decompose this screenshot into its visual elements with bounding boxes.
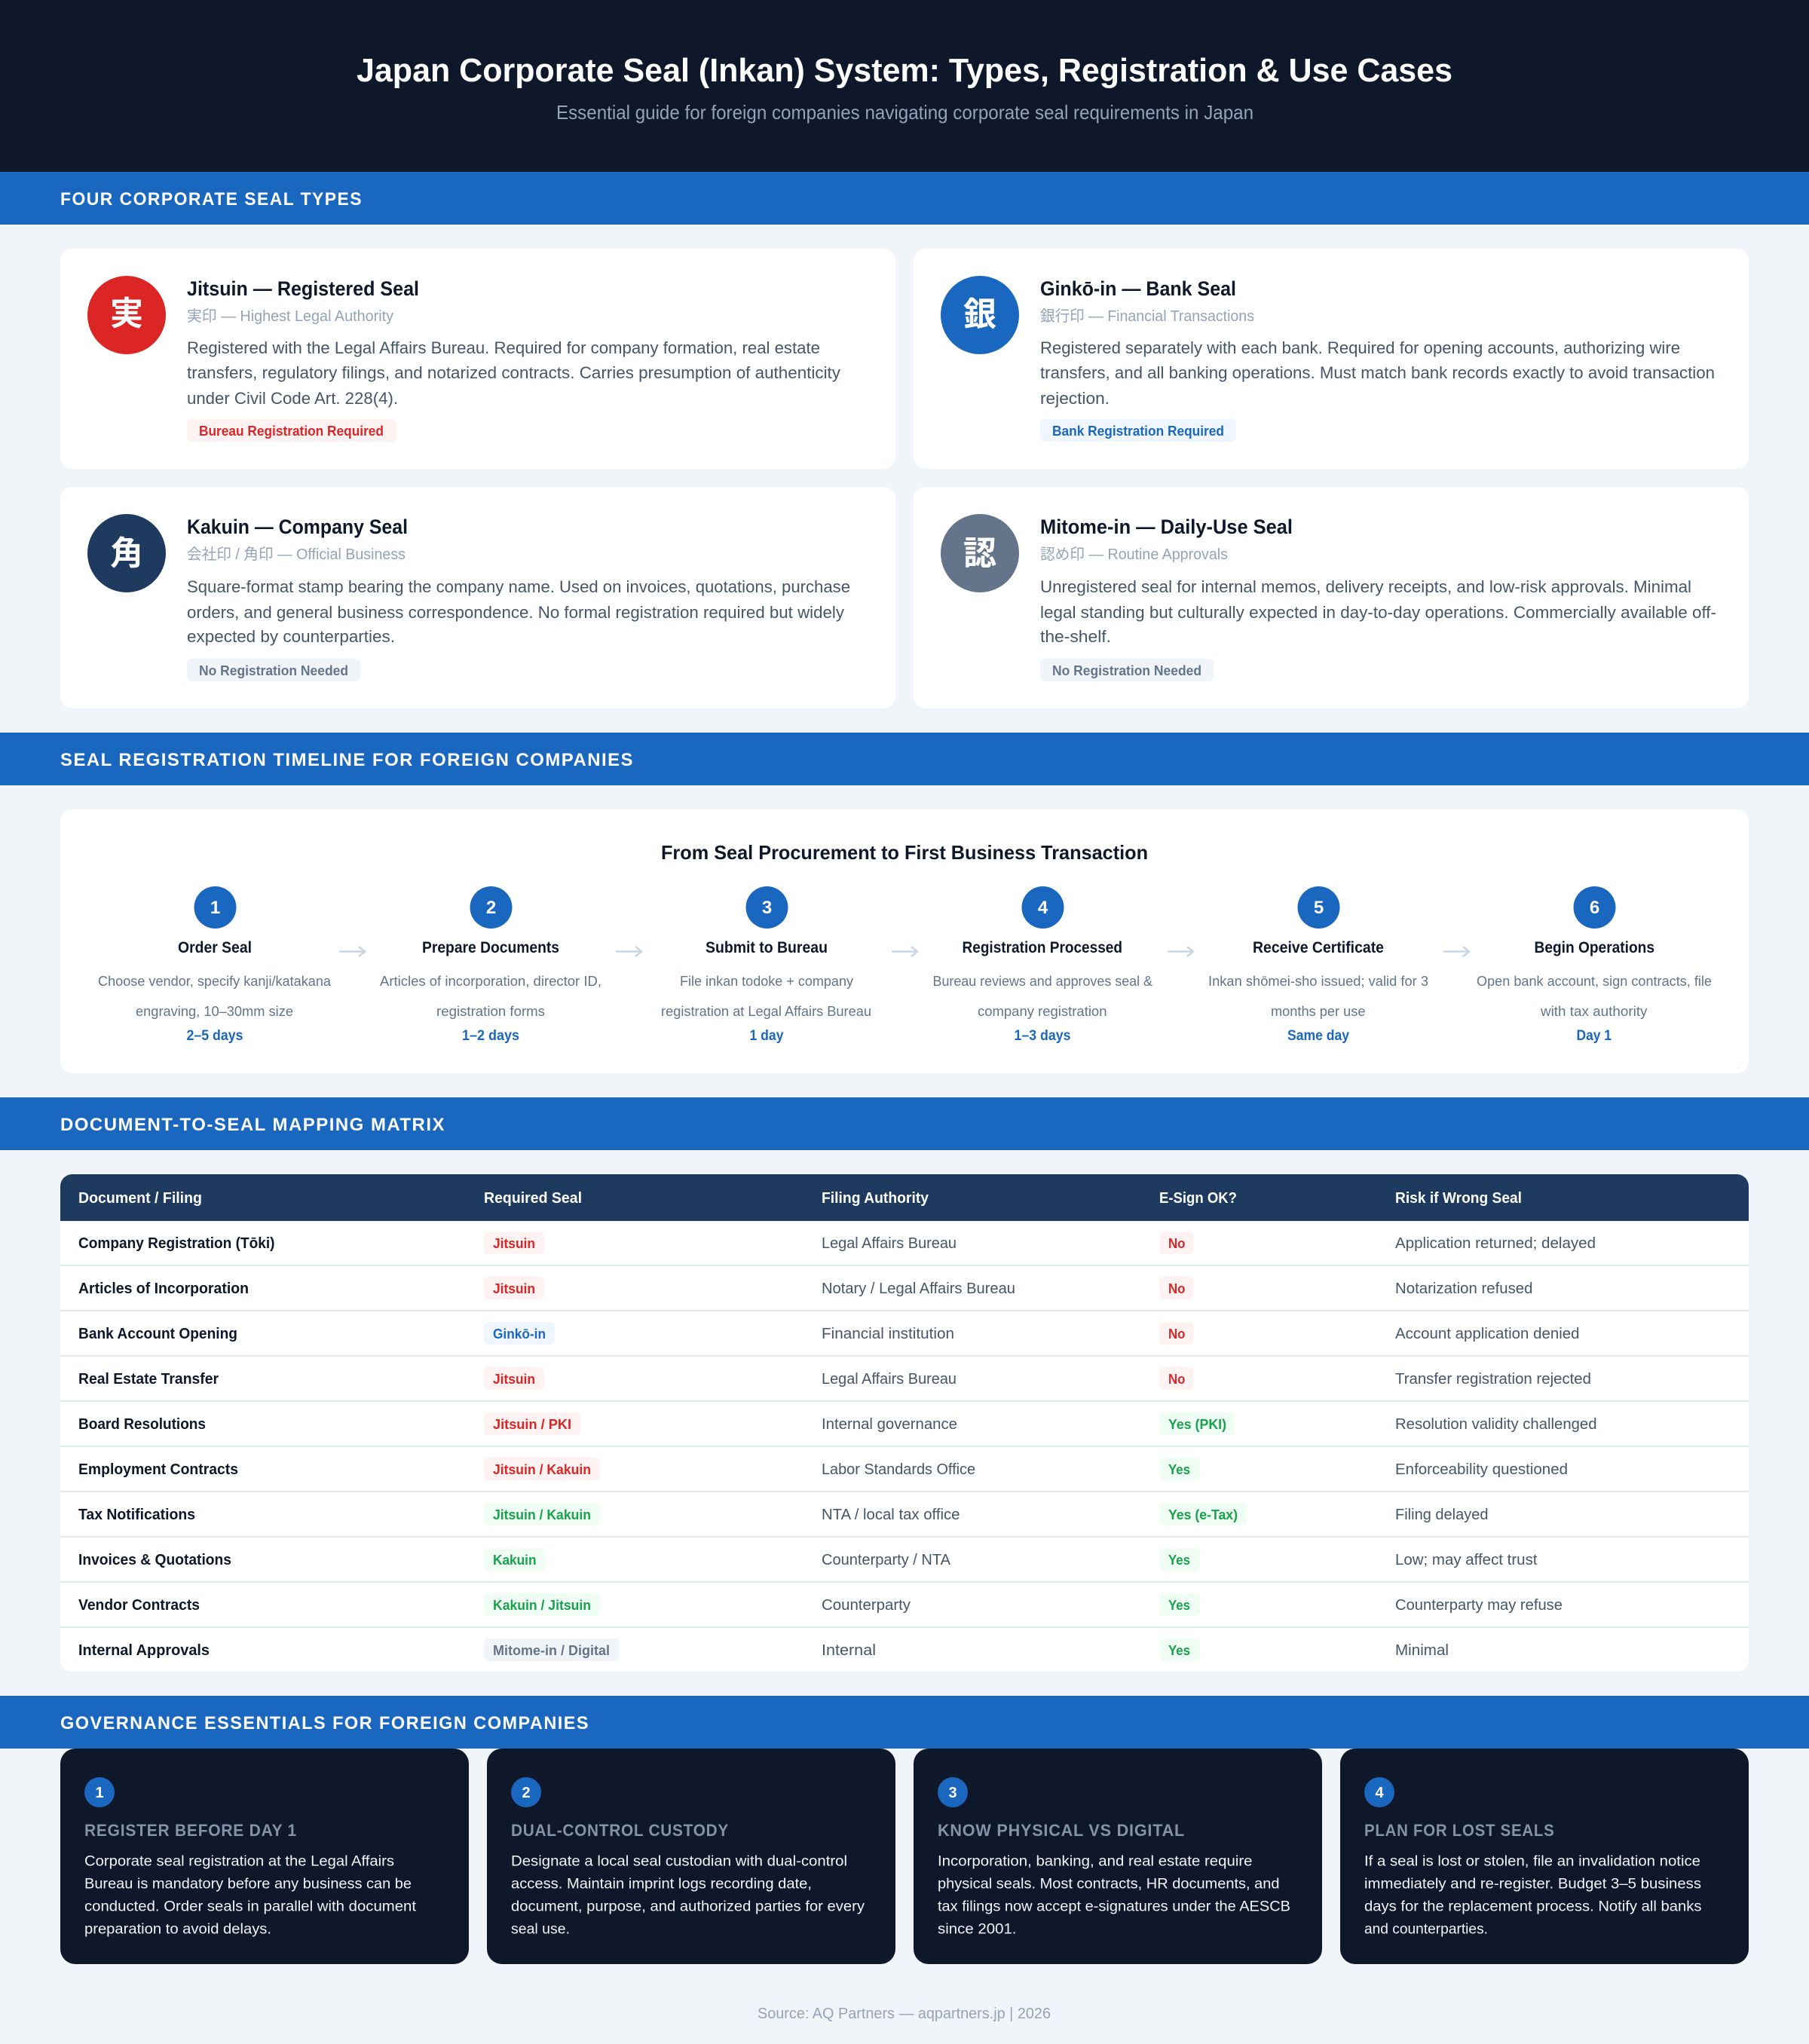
step 3: 3 [762,898,772,918]
tag: no registration needed: No Registration Needed [199,662,348,678]
card title: Kakuin — Company Seal [187,516,408,538]
row: employment contracts: Yes [1168,1461,1190,1477]
card text: seal use. [511,1920,570,1937]
card text: days for the replacement process. Notify all banks [1364,1898,1702,1914]
row: board resolutions: Jitsuin / PKI [493,1416,571,1432]
tag: no registration needed [1040,659,1214,681]
row: tax notifications: Tax Notifications [78,1507,195,1523]
table header row: Required Seal [484,1190,582,1207]
row: internal approvals: Internal [822,1642,876,1659]
step 6: with tax authority [1540,1003,1648,1019]
step 6: 6 [1590,898,1599,918]
card subtitle: 会社印 / 角印 — Official Business [187,546,406,563]
tag: bureau registration required: Bureau Registration Required [199,423,384,439]
step 1: Order Seal [178,939,252,956]
card body: the-shelf. [1040,627,1111,646]
card subtitle: 実印 — Highest Legal Authority [187,308,393,325]
card body: legal standing but culturally expected in day-to-day operations. Commercially available off- [1040,603,1716,622]
tag: bank registration required: Bank Registration Required [1052,423,1224,439]
card text: Incorporation, banking, and real estate require [938,1853,1253,1869]
section heading: mapping matrix: DOCUMENT-TO-SEAL MAPPING MATRIX [60,1115,445,1135]
row: vendor contracts: Counterparty [822,1596,911,1614]
row: real estate transfer [78,1367,1591,1390]
card text: document, purpose, and authorized parties for every [511,1898,865,1914]
card subtitle: 銀行印 — Financial Transactions [1040,308,1254,325]
row: employment contracts: Employment Contracts [78,1461,238,1478]
card body: Registered with the Legal Affairs Bureau. Required for company formation, real estate [187,338,820,357]
step 3 [661,886,871,1044]
icon: Mitome-in seal [941,514,1019,592]
row: tax notifications: Yes (e-Tax) [1168,1507,1238,1522]
tag: bureau registration required [187,419,396,442]
step 2: 2 [486,898,496,918]
table header row: Risk if Wrong Seal [1395,1190,1522,1207]
header banner [0,0,1809,172]
arrow [892,947,917,956]
row: employment contracts: Labor Standards Office [822,1461,975,1478]
icon: Ginko-in seal [941,276,1019,354]
number badge [511,1777,541,1807]
step 1 [98,886,332,1044]
row: articles of incorporation: Notary / Legal Affairs Bureau [822,1280,1015,1297]
card text: preparation to avoid delays. [84,1920,271,1937]
row: employment contracts: Jitsuin / Kakuin [493,1461,591,1477]
number badge [938,1777,968,1807]
icon: Jitsuin seal [87,276,166,354]
card body: orders, and general business correspondence. No formal registration required but widely [187,603,844,622]
panel: Kakuin card [60,487,895,708]
table header row: Filing Authority [822,1190,929,1207]
row: real estate transfer: Legal Affairs Bureau [822,1370,957,1388]
row: employment contracts [78,1458,1568,1480]
card text: Corporate seal registration at the Legal Affairs [84,1853,394,1869]
step 6: Day 1 [1577,1028,1612,1044]
number badge: 3 [948,1785,957,1801]
card body: under Civil Code Art. 228(4). [187,389,398,408]
row: company registration: Company Registration (Tōki) [78,1235,274,1252]
step 1: engraving, 10–30mm size [136,1003,293,1019]
row: board resolutions: Internal governance [822,1415,957,1433]
step 4: 1–3 days [1015,1028,1070,1044]
number badge: 1 [95,1785,104,1801]
row: company registration: Legal Affairs Bureau [822,1235,957,1252]
title: Japan Corporate Seal (Inkan) System: Types, Registration & Use Cases [357,52,1452,89]
row: vendor contracts: Vendor Contracts [78,1597,200,1614]
number badge: 4 [1375,1785,1384,1801]
table: document to seal matrix [60,1174,1749,1672]
card body: Unregistered seal for internal memos, delivery receipts, and low-risk approvals. Minimal [1040,577,1691,596]
table header row [60,1174,1749,1221]
step 2: 1–2 days [462,1028,519,1044]
step 5: Same day [1287,1028,1349,1044]
card body [187,338,840,408]
row: bank account opening: Bank Account Opening [78,1326,237,1342]
card text: conducted. Order seals in parallel with document [84,1898,417,1914]
arrow [616,947,641,956]
card body: Registered separately with each bank. Required for opening accounts, authorizing wire [1040,338,1680,357]
row: bank account opening: Financial institution [822,1325,954,1342]
row: tax notifications: Jitsuin / Kakuin [493,1507,591,1522]
panel: timeline [60,809,1749,1073]
section heading: registration timeline: SEAL REGISTRATION TIMELINE FOR FOREIGN COMPANIES [60,750,634,770]
card text: and counterparties. [1364,1920,1488,1937]
card text: tax filings now accept e-signatures under the AESCB [938,1898,1290,1914]
card title: Ginkō-in — Bank Seal [1040,277,1236,300]
row: vendor contracts: Kakuin / Jitsuin [493,1597,591,1613]
step 3: Submit to Bureau [706,939,828,956]
card text [84,1853,417,1937]
row: tax notifications: NTA / local tax office [822,1506,960,1523]
step 5: Inkan shōmei-sho issued; valid for 3 [1208,973,1428,989]
row: real estate transfer: Jitsuin [493,1371,535,1387]
step 5: Receive Certificate [1253,939,1384,956]
card body [1040,577,1716,646]
row: articles of incorporation [78,1277,1533,1299]
step 4: Registration Processed [962,939,1122,956]
step 1: 2–5 days [187,1028,243,1044]
row: employment contracts: Enforceability questioned [1395,1461,1568,1478]
card text: immediately and re-register. Budget 3–5 business [1364,1875,1701,1892]
row: real estate transfer: Real Estate Transfer [78,1371,219,1388]
section heading: registration timeline [0,733,1809,785]
step 4 [933,886,1153,1044]
card text: since 2001. [938,1920,1016,1937]
row: invoices and quotations: Low; may affect trust [1395,1551,1538,1568]
step 2 [380,886,601,1044]
row: bank account opening: Account application denied [1395,1325,1580,1342]
card body: transfers, regulatory filings, and notarized contracts. Carries presumption of authenticity [187,363,840,382]
row: board resolutions [78,1412,1596,1435]
row: tax notifications: Filing delayed [1395,1506,1488,1523]
row: internal approvals: Minimal [1395,1642,1449,1659]
step 3: 1 day [749,1028,784,1044]
subtitle: Essential guide for foreign companies navigating corporate seal requirements in Japan [556,101,1253,124]
card heading: DUAL-CONTROL CUSTODY [511,1821,729,1840]
row: board resolutions: Yes (PKI) [1168,1416,1226,1432]
card heading: PLAN FOR LOST SEALS [1364,1821,1554,1840]
card text [1364,1853,1702,1937]
row: bank account opening [78,1322,1580,1345]
card title: Jitsuin — Registered Seal [187,277,419,300]
step 2: Articles of incorporation, director ID, [380,973,601,989]
step 4: company registration [978,1003,1107,1019]
row: vendor contracts: Counterparty may refuse [1395,1596,1563,1614]
row: invoices and quotations: Invoices & Quotations [78,1552,231,1568]
row: articles of incorporation: Articles of Incorporation [78,1281,249,1297]
step 6: Begin Operations [1535,939,1654,956]
row: internal approvals [78,1639,1449,1661]
number badge [84,1777,115,1807]
row: vendor contracts: Yes [1168,1597,1190,1613]
step 5: 5 [1314,898,1324,918]
step 3: File inkan todoke + company [680,973,854,989]
row: invoices and quotations [78,1548,1538,1571]
step 5 [1208,886,1428,1044]
row: company registration [78,1232,1596,1254]
panel: plan for lost seals [1340,1749,1749,1964]
row: internal approvals: Internal Approvals [78,1642,210,1659]
step 2: registration forms [436,1003,545,1019]
card text [938,1853,1290,1937]
row: company registration: Application returned; delayed [1395,1235,1596,1252]
card subtitle: 認め印 — Routine Approvals [1040,546,1228,563]
card title: Mitome-in — Daily-Use Seal [1040,516,1293,538]
arrow [339,947,365,956]
tag: no registration needed: No Registration Needed [1052,662,1201,678]
step 2: Prepare Documents [422,939,559,956]
panel: Mitome-in card [914,487,1749,708]
number badge [1364,1777,1394,1807]
row: real estate transfer: Transfer registration rejected [1395,1370,1591,1388]
step 1: 1 [210,898,220,918]
card text: If a seal is lost or stolen, file an invalidation notice [1364,1853,1700,1869]
table header row: Document / Filing [78,1190,202,1207]
step 4: 4 [1038,898,1048,918]
row: articles of incorporation: Jitsuin [493,1281,535,1296]
row: tax notifications [78,1503,1488,1525]
panel: dual-control custody [487,1749,895,1964]
step 4: Bureau reviews and approves seal & [933,973,1153,989]
table header row: E-Sign OK? [1159,1190,1237,1207]
card body: transfers, and all banking operations. Must match bank records exactly to avoid transaction [1040,363,1715,382]
card body: Square-format stamp bearing the company name. Used on invoices, quotations, purchase [187,577,850,596]
row: articles of incorporation: No [1168,1281,1185,1296]
step 5: months per use [1271,1003,1366,1019]
row: invoices and quotations: Yes [1168,1552,1190,1568]
row: board resolutions: Board Resolutions [78,1416,206,1433]
section heading: mapping matrix [0,1097,1809,1150]
card text: Designate a local seal custodian with dual-control [511,1853,847,1869]
row: real estate transfer: No [1168,1371,1185,1387]
panel: Ginko-in card [914,249,1749,469]
panel: Jitsuin card [60,249,895,469]
card text: physical seals. Most contracts, HR documents, and [938,1875,1280,1892]
icon: Kakuin seal [87,514,166,592]
row: board resolutions: Resolution validity challenged [1395,1415,1596,1433]
card heading: REGISTER BEFORE DAY 1 [84,1821,297,1840]
row: articles of incorporation: Notarization refused [1395,1280,1533,1297]
card body [187,577,850,646]
section heading: four corporate seal types: FOUR CORPORATE SEAL TYPES [60,189,363,210]
section heading: governance essentials [0,1696,1809,1749]
row: invoices and quotations: Kakuin [493,1552,537,1568]
card body: expected by counterparties. [187,627,395,646]
card text: Bureau is mandatory before any business can be [84,1875,412,1892]
step 6 [1477,886,1712,1044]
card text: access. Maintain imprint logs recording date, [511,1875,812,1892]
row: internal approvals: Mitome-in / Digital [493,1642,610,1658]
tag: bank registration required [1040,419,1236,442]
row: company registration: No [1168,1235,1185,1251]
row: company registration: Jitsuin [493,1235,535,1251]
row: invoices and quotations: Counterparty / NTA [822,1551,950,1568]
source footer: Source: AQ Partners — aqpartners.jp | 2026 [758,2006,1051,2022]
arrow [1168,947,1193,956]
step 1: Choose vendor, specify kanji/katakana [98,973,332,989]
card body: rejection. [1040,389,1110,408]
row: bank account opening: Ginkō-in [493,1326,546,1342]
icon: Kakuin seal: 角 [110,526,143,574]
card heading: KNOW PHYSICAL VS DIGITAL [938,1821,1185,1840]
icon: Ginko-in seal: 銀 [963,287,996,335]
row: bank account opening: No [1168,1326,1185,1342]
icon: Mitome-in seal: 認 [963,526,996,574]
timeline heading: From Seal Procurement to First Business Transaction [661,841,1148,864]
step 3: registration at Legal Affairs Bureau [661,1003,871,1019]
card text [511,1853,865,1937]
card body [1040,338,1715,408]
panel: know physical vs digital [914,1749,1322,1964]
section heading: governance essentials: GOVERNANCE ESSENTIALS FOR FOREIGN COMPANIES [60,1713,589,1733]
arrow [1443,947,1469,956]
tag: no registration needed [187,659,360,681]
icon: Jitsuin seal: 実 [110,286,143,335]
step 6: Open bank account, sign contracts, file [1477,973,1712,989]
row: vendor contracts [78,1593,1563,1616]
number badge: 2 [522,1785,531,1801]
row: internal approvals: Yes [1168,1642,1190,1658]
panel: register before day 1 [60,1749,469,1964]
section heading: four corporate seal types [0,172,1809,225]
